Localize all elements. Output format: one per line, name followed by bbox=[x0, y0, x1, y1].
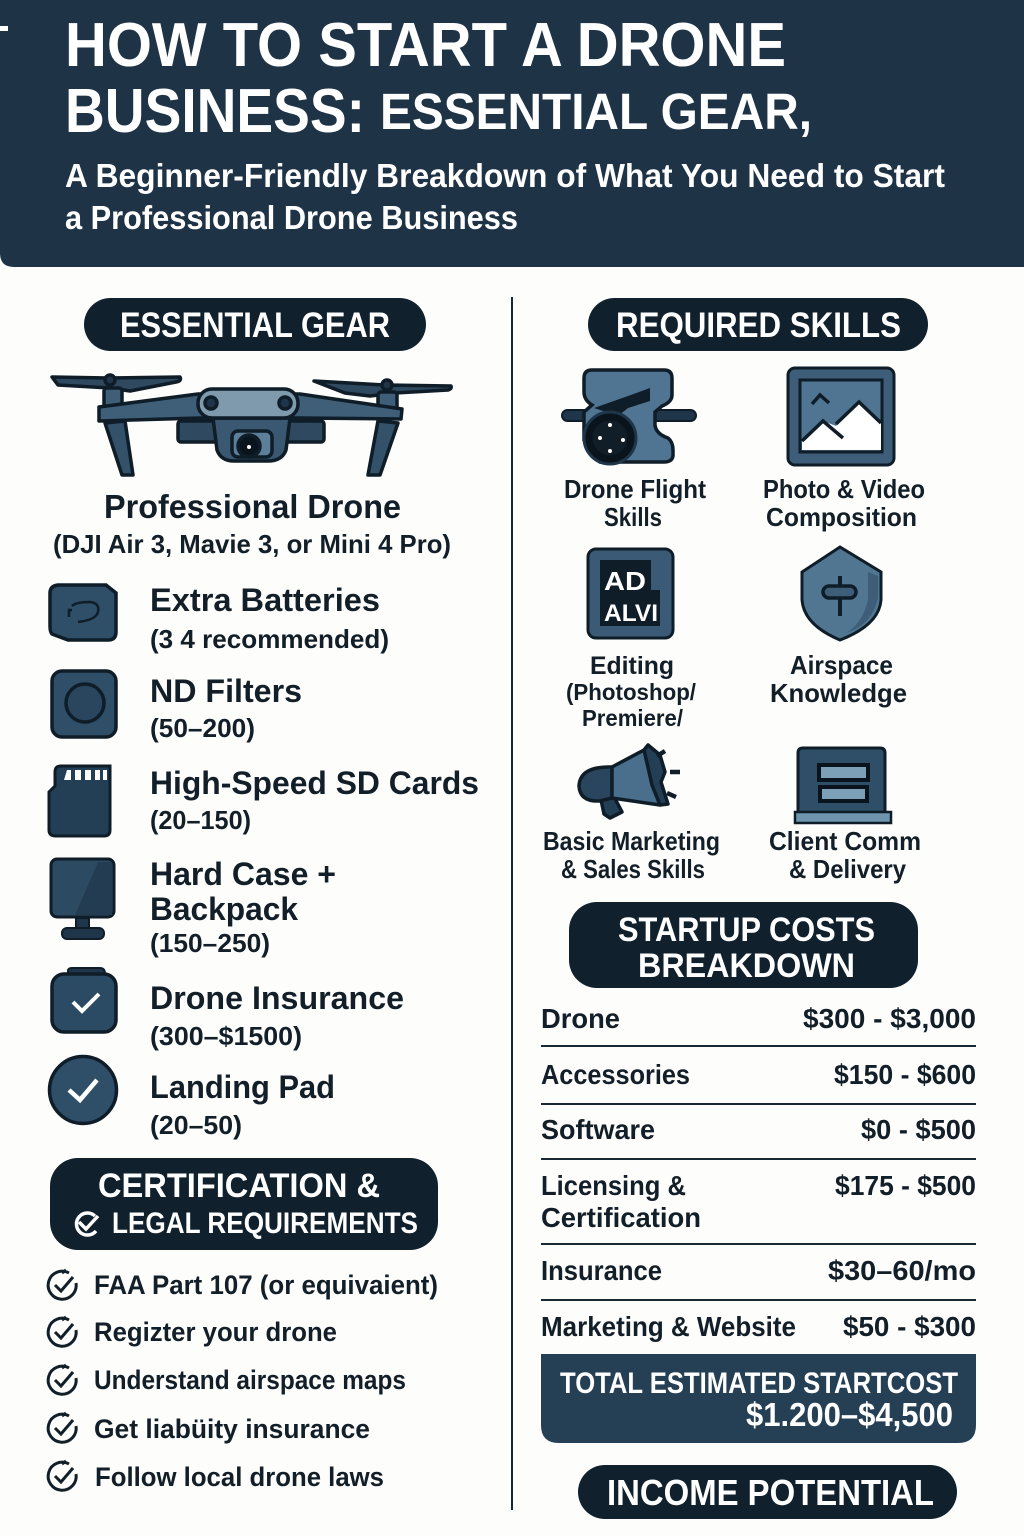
item: landing pad bbox=[50, 1056, 335, 1140]
item: nd filters: (50–200) bbox=[150, 713, 255, 743]
icon: nd filter bbox=[52, 671, 116, 737]
item: hard case and backpack: (150–250) bbox=[150, 928, 270, 958]
item: extra batteries: (3 4 recommended) bbox=[150, 624, 389, 654]
item: hard case and backpack bbox=[51, 856, 336, 958]
skill: marketing: Basic Marketing bbox=[543, 826, 720, 856]
item: faa part 107: FAA Part 107 (or equivaient) bbox=[94, 1270, 438, 1300]
heading: required skills: REQUIRED SKILLS bbox=[616, 306, 901, 345]
item: nd filters: ND Filters bbox=[150, 673, 302, 709]
panel: startup costs bbox=[541, 902, 976, 1443]
subtitle: a Professional Drone Business bbox=[65, 199, 518, 236]
icon: sd card bbox=[49, 766, 110, 836]
icon: landing pad bbox=[50, 1056, 116, 1124]
skill: client communication bbox=[769, 748, 921, 884]
icon: laptop bbox=[795, 748, 891, 823]
item: drone insurance: Drone Insurance bbox=[150, 980, 404, 1016]
heading: certification bbox=[50, 1158, 438, 1250]
item: extra batteries: Extra Batteries bbox=[150, 582, 380, 618]
panel: required skills bbox=[543, 298, 928, 884]
panel: certification and legal requirements bbox=[48, 1158, 438, 1492]
row: marketing bbox=[541, 1311, 976, 1342]
icon: shield bbox=[802, 547, 881, 640]
item: sd cards bbox=[49, 765, 479, 836]
heading: essential gear bbox=[84, 298, 426, 351]
row: drone: $300 - $3,000 bbox=[803, 1003, 976, 1034]
item: register drone: Regizter your drone bbox=[94, 1317, 337, 1347]
row: accessories bbox=[541, 1059, 976, 1090]
skill: drone flight bbox=[562, 370, 706, 532]
title: HOW TO START A DRONE bbox=[65, 11, 786, 80]
total cost box: TOTAL ESTIMATED STARTCOST bbox=[560, 1367, 958, 1400]
icon: photo frame bbox=[788, 368, 894, 465]
item: nd filters bbox=[52, 671, 302, 743]
skill: marketing: & Sales Skills bbox=[561, 854, 705, 884]
item: local laws: Follow local drone laws bbox=[95, 1462, 384, 1492]
subtitle: A Beginner-Friendly Breakdown of What You Need to Start bbox=[65, 157, 945, 194]
column divider bbox=[511, 297, 513, 1510]
row: insurance: Insurance bbox=[541, 1255, 662, 1286]
icon: editing software bbox=[588, 549, 673, 638]
skill: airspace knowledge: Airspace bbox=[790, 650, 893, 680]
skill: drone flight: Drone Flight bbox=[564, 474, 706, 504]
row: marketing: Marketing & Website bbox=[541, 1311, 796, 1342]
cost table bbox=[541, 1003, 976, 1342]
icon: heading check bbox=[76, 1213, 98, 1235]
skill: client communication: & Delivery bbox=[789, 854, 906, 884]
skill: editing: Editing bbox=[590, 652, 674, 680]
skill: editing: Premiere/ bbox=[582, 705, 684, 731]
heading: income potential bbox=[578, 1465, 957, 1519]
skill: editing bbox=[566, 549, 697, 731]
skill: airspace knowledge bbox=[770, 547, 907, 708]
item: drone insurance bbox=[52, 968, 404, 1051]
total cost box: $1.200–$4,500 bbox=[746, 1396, 953, 1433]
heading: essential gear: ESSENTIAL GEAR bbox=[120, 306, 390, 345]
icon: megaphone bbox=[579, 745, 680, 818]
item: sd cards: High-Speed SD Cards bbox=[150, 765, 479, 801]
row: drone bbox=[541, 1003, 976, 1034]
skill: photo and video bbox=[763, 368, 925, 532]
icon: editing software: ALVI bbox=[604, 600, 658, 627]
row: accessories: Accessories bbox=[541, 1059, 690, 1090]
item: sd cards: (20–150) bbox=[150, 805, 251, 835]
drone name: Professional Drone bbox=[104, 488, 401, 525]
heading: certification: CERTIFICATION & bbox=[98, 1167, 380, 1205]
row: software: Software bbox=[541, 1114, 655, 1145]
item: landing pad: Landing Pad bbox=[150, 1069, 335, 1105]
item: airspace maps: Understand airspace maps bbox=[94, 1365, 406, 1395]
item: hard case and backpack: Backpack bbox=[150, 891, 298, 927]
row: marketing: $50 - $300 bbox=[843, 1311, 976, 1342]
title: ESSENTIAL GEAR, bbox=[380, 83, 812, 140]
row: licensing: Licensing & bbox=[541, 1170, 686, 1201]
icon: battery bbox=[50, 585, 116, 640]
icon: insurance bbox=[52, 968, 116, 1032]
icon: editing software: AD bbox=[604, 566, 646, 596]
heading: required skills bbox=[588, 298, 928, 351]
title: BUSINESS: bbox=[65, 77, 365, 146]
item: extra batteries bbox=[50, 582, 389, 654]
row: licensing: Certification bbox=[541, 1202, 701, 1233]
header banner bbox=[0, 0, 1024, 267]
skill: photo and video: Photo & Video bbox=[763, 474, 925, 504]
heading: certification: LEGAL REQUIREMENTS bbox=[112, 1207, 418, 1240]
row: insurance: $30–60/mo bbox=[828, 1255, 976, 1286]
row: licensing: $175 - $500 bbox=[835, 1170, 976, 1201]
heading: startup costs: STARTUP COSTS bbox=[618, 911, 875, 949]
total cost box bbox=[541, 1354, 976, 1443]
item: landing pad: (20–50) bbox=[150, 1110, 242, 1140]
subtitle bbox=[65, 157, 945, 236]
item: liability insurance: Get liabüity insurance bbox=[94, 1414, 370, 1444]
icon: hard case bbox=[51, 859, 114, 939]
heading: income potential: INCOME POTENTIAL bbox=[607, 1472, 934, 1513]
skill: photo and video: Composition bbox=[766, 502, 917, 532]
title bbox=[65, 11, 812, 146]
row: software: $0 - $500 bbox=[861, 1114, 976, 1145]
skill: airspace knowledge: Knowledge bbox=[770, 678, 907, 708]
icon: drone camera bbox=[562, 370, 696, 464]
row: software bbox=[541, 1114, 976, 1145]
skill: editing: (Photoshop/ bbox=[566, 679, 697, 705]
panel: essential gear bbox=[49, 298, 479, 1140]
row: drone: Drone bbox=[541, 1003, 620, 1034]
heading: startup costs: BREAKDOWN bbox=[638, 947, 855, 985]
skill: marketing bbox=[543, 745, 720, 884]
item: drone insurance: (300–$1500) bbox=[150, 1021, 302, 1051]
icon: drone illustration bbox=[52, 375, 451, 475]
row: licensing bbox=[541, 1170, 976, 1233]
row: insurance bbox=[541, 1255, 976, 1286]
drone name bbox=[53, 488, 451, 559]
checklist bbox=[48, 1270, 438, 1492]
skill: client communication: Client Comm bbox=[769, 826, 921, 856]
skill: drone flight: Skills bbox=[604, 502, 662, 532]
heading: startup costs bbox=[569, 902, 918, 988]
item: hard case and backpack: Hard Case + bbox=[150, 856, 336, 892]
row: accessories: $150 - $600 bbox=[834, 1059, 976, 1090]
drone name: (DJI Air 3, Mavie 3, or Mini 4 Pro) bbox=[53, 529, 451, 559]
